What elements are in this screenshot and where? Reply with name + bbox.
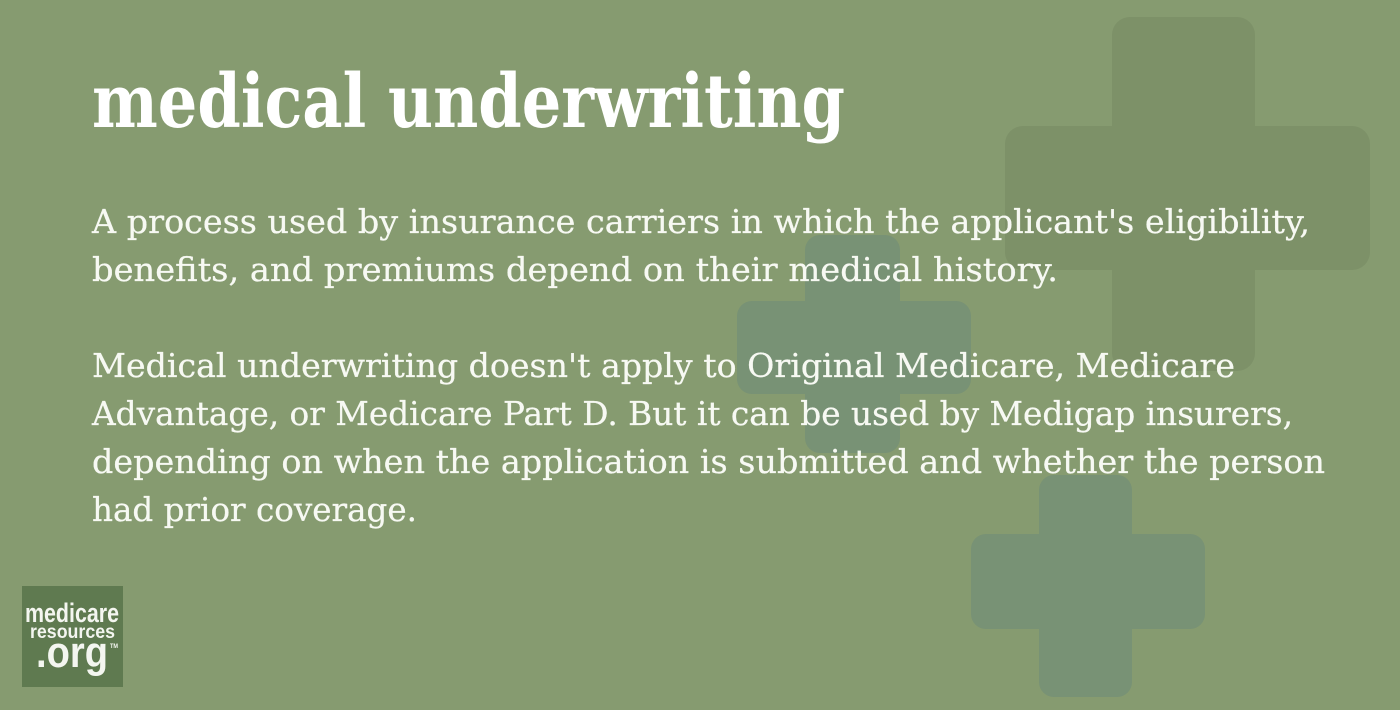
text block: definition: benefits, and premiums depend on their medical history. (92, 250, 1058, 289)
text block: application to Medicare: had prior coverage. (92, 490, 417, 529)
logo: medicareresources.org: TM (110, 644, 118, 650)
text block: application to Medicare: Advantage, or Medicare Part D. But it can be used by Medigap insurers, (91, 394, 1293, 433)
logo: medicareresources.org: medicare (25, 598, 119, 628)
icon: middle background cross (737, 235, 971, 453)
text block: definition (91, 202, 1310, 289)
text block: definition: A process used by insurance carriers in which the applicant's eligibility, (91, 202, 1310, 241)
icon: large background cross (1005, 17, 1370, 371)
logo: medicareresources.org: resources (30, 622, 115, 643)
title: medical underwriting (92, 59, 845, 145)
logo: medicareresources.org: .org (36, 628, 108, 677)
logo: medicareresources.org (22, 586, 123, 687)
text block: application to Medicare (91, 346, 1325, 529)
text block: application to Medicare: depending on when the application is submitted and whether the person (92, 442, 1325, 481)
text block: application to Medicare: Medical underwriting doesn't apply to Original Medicare, Medicare (92, 346, 1235, 385)
icon: lower background cross (971, 475, 1205, 697)
